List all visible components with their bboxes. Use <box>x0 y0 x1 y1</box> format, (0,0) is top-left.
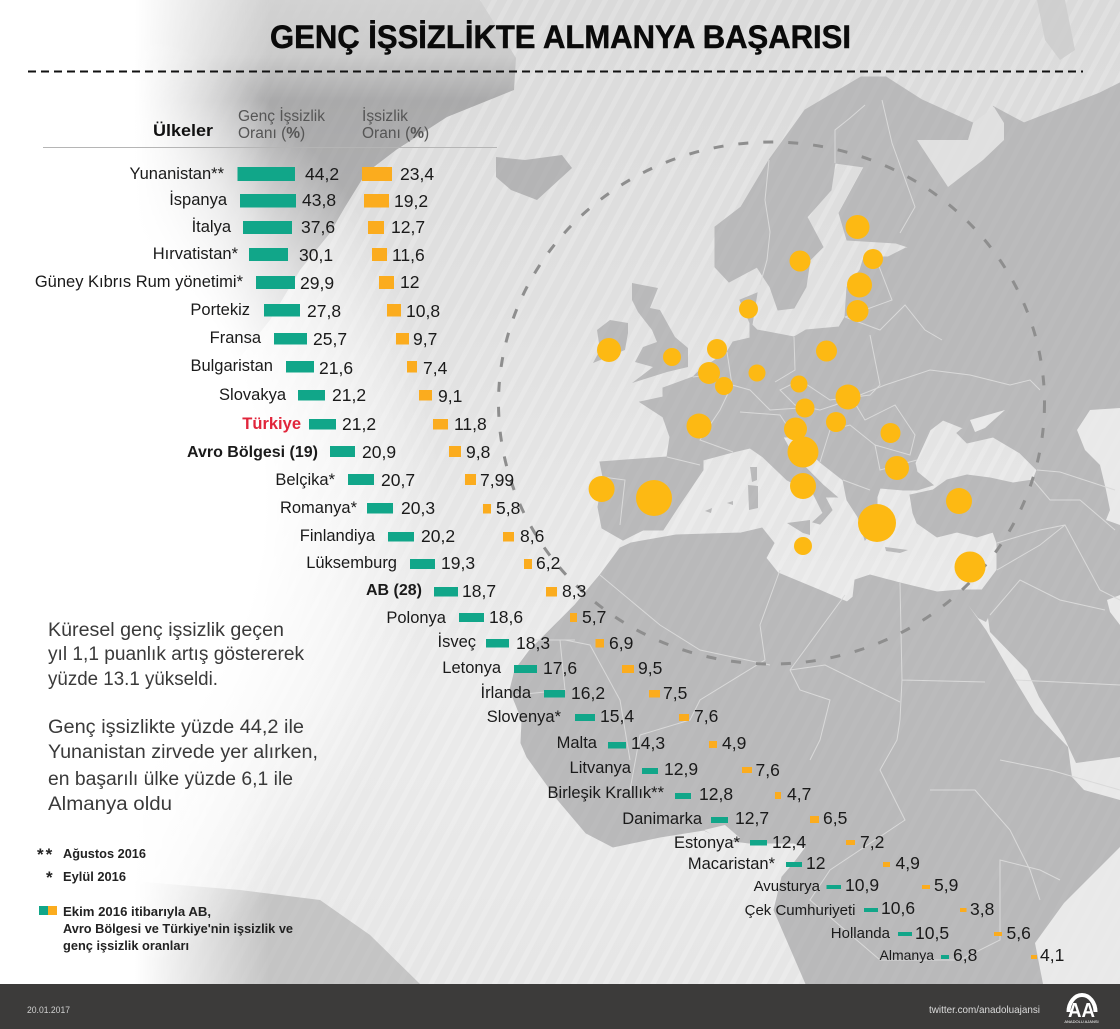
row: Lüksemburg: 19,3 <box>441 553 475 573</box>
row: Portekiz: 10,8 <box>406 301 440 321</box>
row: İrlanda: 7,5 <box>663 683 687 703</box>
row: Bulgaristan: 21,6 <box>319 358 353 378</box>
row: Bulgaristan: Bulgaristan <box>190 357 273 375</box>
land: South America <box>120 880 420 984</box>
row: Yunanistan: Yunanistan** <box>130 165 225 183</box>
row: Birleşik Krallık: 12,8 <box>699 784 733 804</box>
row: Estonya: Estonya* <box>674 834 741 852</box>
row: Avusturya <box>754 875 958 895</box>
row: Romanya <box>280 498 520 518</box>
row: Slovenya: 7,6 <box>694 706 718 726</box>
icon: AA logo: AA <box>1068 1000 1095 1022</box>
legend: footnotes: Ağustos 2016 <box>63 847 146 861</box>
row: Güney Kıbrıs: 12 <box>400 272 419 292</box>
row: Fransa: 25,7 <box>313 329 347 349</box>
row: Litvanya: 12,9 <box>664 759 698 779</box>
sea: Indian Ocean <box>1035 847 1120 984</box>
row: Fransa: Fransa <box>210 329 262 347</box>
row: Polonya: 18,6 <box>489 607 523 627</box>
footer bar: twitter.com/anadoluajansi <box>929 1004 1040 1016</box>
row: Çek Cumhuriyeti <box>745 898 994 919</box>
borders <box>515 100 1120 960</box>
row: Hollanda <box>831 923 1031 943</box>
text block: global youth unemployment: Almanya oldu <box>48 794 172 815</box>
table header: İşsizlik <box>362 107 408 125</box>
row: Danimarka <box>622 808 847 828</box>
row: Türkiye: 21,2 <box>342 414 376 434</box>
row: Avro Bölgesi: Avro Bölgesi (19) <box>187 444 318 461</box>
legend: footnotes: Avro Bölgesi ve Türkiye'nin işsizlik ve <box>63 922 293 936</box>
row: Finlandiya: 8,6 <box>520 526 544 546</box>
row: AB (28) <box>366 581 586 601</box>
legend: footnotes: genç işsizlik oranları <box>63 939 189 953</box>
row: Güney Kıbrıs: Güney Kıbrıs Rum yönetimi* <box>35 273 244 291</box>
row: Macaristan <box>688 853 920 873</box>
row: Slovenya <box>487 706 718 726</box>
row: Çek Cumhuriyeti: Çek Cumhuriyeti <box>745 902 856 919</box>
row: Finlandiya: Finlandiya <box>300 527 376 545</box>
row: İtalya: 12,7 <box>391 217 425 237</box>
row: Hollanda: 5,6 <box>1006 923 1031 943</box>
row: Slovakya: Slovakya <box>219 386 287 404</box>
row: Türkiye <box>242 414 487 434</box>
row: Malta: Malta <box>557 734 598 752</box>
land: Eurasia and Africa <box>510 77 1120 984</box>
row: Birleşik Krallık <box>548 784 811 804</box>
row: Letonya <box>442 658 662 678</box>
row: Malta: 4,9 <box>722 733 746 753</box>
row: Slovenya: Slovenya* <box>487 708 562 726</box>
row: Estonya <box>674 832 884 852</box>
text block: global youth unemployment: yüzde 13.1 yükseldi. <box>48 669 218 690</box>
row: Çek Cumhuriyeti: 10,6 <box>881 898 915 918</box>
row: Fransa <box>210 329 437 349</box>
row: Portekiz <box>190 301 440 321</box>
row: Hollanda: Hollanda <box>831 925 891 942</box>
row: Bulgaristan <box>190 357 448 378</box>
row: Romanya: Romanya* <box>280 499 358 517</box>
land: Greenland <box>100 0 516 420</box>
row: Macaristan: Macaristan* <box>688 855 776 873</box>
row: Belçika: Belçika* <box>275 471 336 489</box>
row: İrlanda: İrlanda <box>481 683 532 702</box>
dashed circle <box>498 142 1044 664</box>
row: Belçika <box>275 470 514 490</box>
row: Hırvatistan: 11,6 <box>392 245 425 265</box>
row: Estonya: 7,2 <box>860 832 884 852</box>
row: Güney Kıbrıs <box>35 272 419 293</box>
row: Finlandiya <box>300 526 544 546</box>
table header <box>43 107 497 148</box>
legend: footnotes: Ekim 2016 itibarıyla AB, <box>63 905 211 919</box>
row: Litvanya <box>570 759 780 780</box>
table header: Genç İşsizlik <box>238 107 325 125</box>
row: Belçika: 7,99 <box>480 470 514 490</box>
row: AB (28): AB (28) <box>366 582 422 599</box>
land: Ireland <box>593 320 628 363</box>
row: Bulgaristan: 7,4 <box>423 358 448 378</box>
row: İtalya <box>192 217 425 237</box>
row: Portekiz: 27,8 <box>307 301 341 321</box>
row: Litvanya: 7,6 <box>756 760 780 780</box>
row: Litvanya: Litvanya <box>570 759 632 777</box>
row: Hırvatistan: 30,1 <box>299 245 333 265</box>
row: Slovenya: 15,4 <box>600 706 634 726</box>
title: GENÇ İŞSİZLİKTE ALMANYA BAŞARISI <box>270 19 851 55</box>
sea: Gulf of Guinea <box>704 825 740 842</box>
land: Iceland <box>496 155 572 200</box>
row: Slovakya: 21,2 <box>332 385 366 405</box>
row: Macaristan: 4,9 <box>896 853 920 873</box>
row: Almanya: 4,1 <box>1040 945 1064 965</box>
row: Macaristan: 12 <box>806 853 825 873</box>
row: İspanya: 19,2 <box>394 191 428 211</box>
row: Avusturya: 5,9 <box>934 875 958 895</box>
row: Hollanda: 10,5 <box>915 923 949 943</box>
row: Lüksemburg: 6,2 <box>536 553 560 573</box>
sea: White Sea <box>917 107 1004 187</box>
legend: footnotes <box>37 845 293 953</box>
row: Letonya: 9,5 <box>638 658 662 678</box>
row: İspanya <box>169 190 428 211</box>
table header: Ülkeler <box>153 121 213 140</box>
row: Hırvatistan <box>153 245 425 265</box>
row: Avro Bölgesi: 20,9 <box>362 442 396 462</box>
sea: Persian Gulf <box>1107 595 1120 625</box>
text block: global youth unemployment <box>48 620 318 815</box>
land: Finland and north-west Russia <box>835 90 1120 255</box>
row: Avusturya: 10,9 <box>845 875 879 895</box>
row: Güney Kıbrıs: 29,9 <box>300 273 334 293</box>
row: Malta <box>557 733 746 753</box>
row: Hırvatistan: Hırvatistan* <box>153 245 239 263</box>
row: Polonya: Polonya <box>386 609 447 627</box>
row: Portekiz: Portekiz <box>190 301 250 319</box>
row: Türkiye: 11,8 <box>454 414 487 434</box>
row: İsveç: 18,3 <box>516 633 550 653</box>
icon: AA logo: ANADOLU AJANSI <box>1064 1019 1099 1024</box>
row: Avusturya: Avusturya <box>754 878 821 895</box>
land: Great Britain <box>632 283 688 383</box>
row: Polonya: 5,7 <box>582 607 606 627</box>
row: Avro Bölgesi <box>187 442 490 462</box>
row: Lüksemburg: Lüksemburg <box>306 554 397 572</box>
row: Letonya: 17,6 <box>543 658 577 678</box>
row: Çek Cumhuriyeti: 3,8 <box>970 899 994 919</box>
legend: footnotes: Eylül 2016 <box>63 870 126 884</box>
legend: footnotes: ** <box>37 845 54 864</box>
row: Birleşik Krallık: Birleşik Krallık** <box>548 784 665 802</box>
text block: global youth unemployment: Yunanistan zirvede yer alırken, <box>48 742 318 763</box>
row: Yunanistan <box>130 164 434 184</box>
row: Lüksemburg <box>306 553 560 573</box>
land: Mediterranean islands <box>705 467 908 553</box>
sea: Red Sea and Gulf of Aden <box>968 605 1120 800</box>
row: Yunanistan: 44,2 <box>305 164 339 184</box>
row: İrlanda <box>481 683 687 703</box>
row: İsveç: 6,9 <box>609 633 633 653</box>
row: Romanya: 5,8 <box>496 498 520 518</box>
row: İspanya: 43,8 <box>302 190 336 210</box>
row: Slovakya: 9,1 <box>438 386 462 406</box>
text block: global youth unemployment: en başarılı ülke yüzde 6,1 ile <box>48 769 293 790</box>
row: Finlandiya: 20,2 <box>421 526 455 546</box>
row: AB (28): 8,3 <box>562 581 586 601</box>
row: İsveç: İsveç <box>437 632 476 651</box>
row: Türkiye: Türkiye <box>242 415 301 433</box>
row: Polonya <box>386 607 606 627</box>
row: İtalya: İtalya <box>192 217 232 236</box>
row: AB (28): 18,7 <box>462 581 496 601</box>
row: Letonya: Letonya <box>442 659 502 677</box>
row: Almanya <box>880 945 1064 965</box>
footer bar: 20.01.2017 <box>27 1005 70 1016</box>
country circles <box>589 215 986 582</box>
sea: Caspian <box>1077 408 1120 525</box>
table header: Oranı (%) <box>362 125 429 142</box>
row: Slovakya <box>219 385 462 406</box>
row: Birleşik Krallık: 4,7 <box>787 784 811 804</box>
row: Avro Bölgesi: 9,8 <box>466 442 490 462</box>
row: İtalya: 37,6 <box>301 217 335 237</box>
row: İspanya: İspanya <box>169 190 228 209</box>
row: Danimarka: 6,5 <box>823 808 847 828</box>
row: Fransa: 9,7 <box>413 329 437 349</box>
text block: global youth unemployment: Genç işsizlikte yüzde 44,2 ile <box>48 717 304 738</box>
land: Arctic island <box>1037 0 1075 60</box>
row: İsveç <box>437 632 633 653</box>
text block: global youth unemployment: yıl 1,1 puanlık artış göstererek <box>48 644 305 665</box>
row: Malta: 14,3 <box>631 733 665 753</box>
row: Almanya: Almanya <box>880 947 934 963</box>
footer bar <box>0 984 1120 1029</box>
legend: footnotes: * <box>46 868 53 887</box>
row: Danimarka: Danimarka <box>622 810 703 828</box>
row: İrlanda: 16,2 <box>571 683 605 703</box>
row: Estonya: 12,4 <box>772 832 806 852</box>
icon: AA logo <box>1064 995 1099 1024</box>
row: Almanya: 6,8 <box>953 945 977 965</box>
sea: Azov <box>970 410 1005 432</box>
row: Romanya: 20,3 <box>401 498 435 518</box>
row: Belçika: 20,7 <box>381 470 415 490</box>
row: Danimarka: 12,7 <box>735 808 769 828</box>
text block: global youth unemployment: Küresel genç işsizlik geçen <box>48 620 284 641</box>
table header: Oranı (%) <box>238 125 305 142</box>
row: Yunanistan: 23,4 <box>400 164 434 184</box>
